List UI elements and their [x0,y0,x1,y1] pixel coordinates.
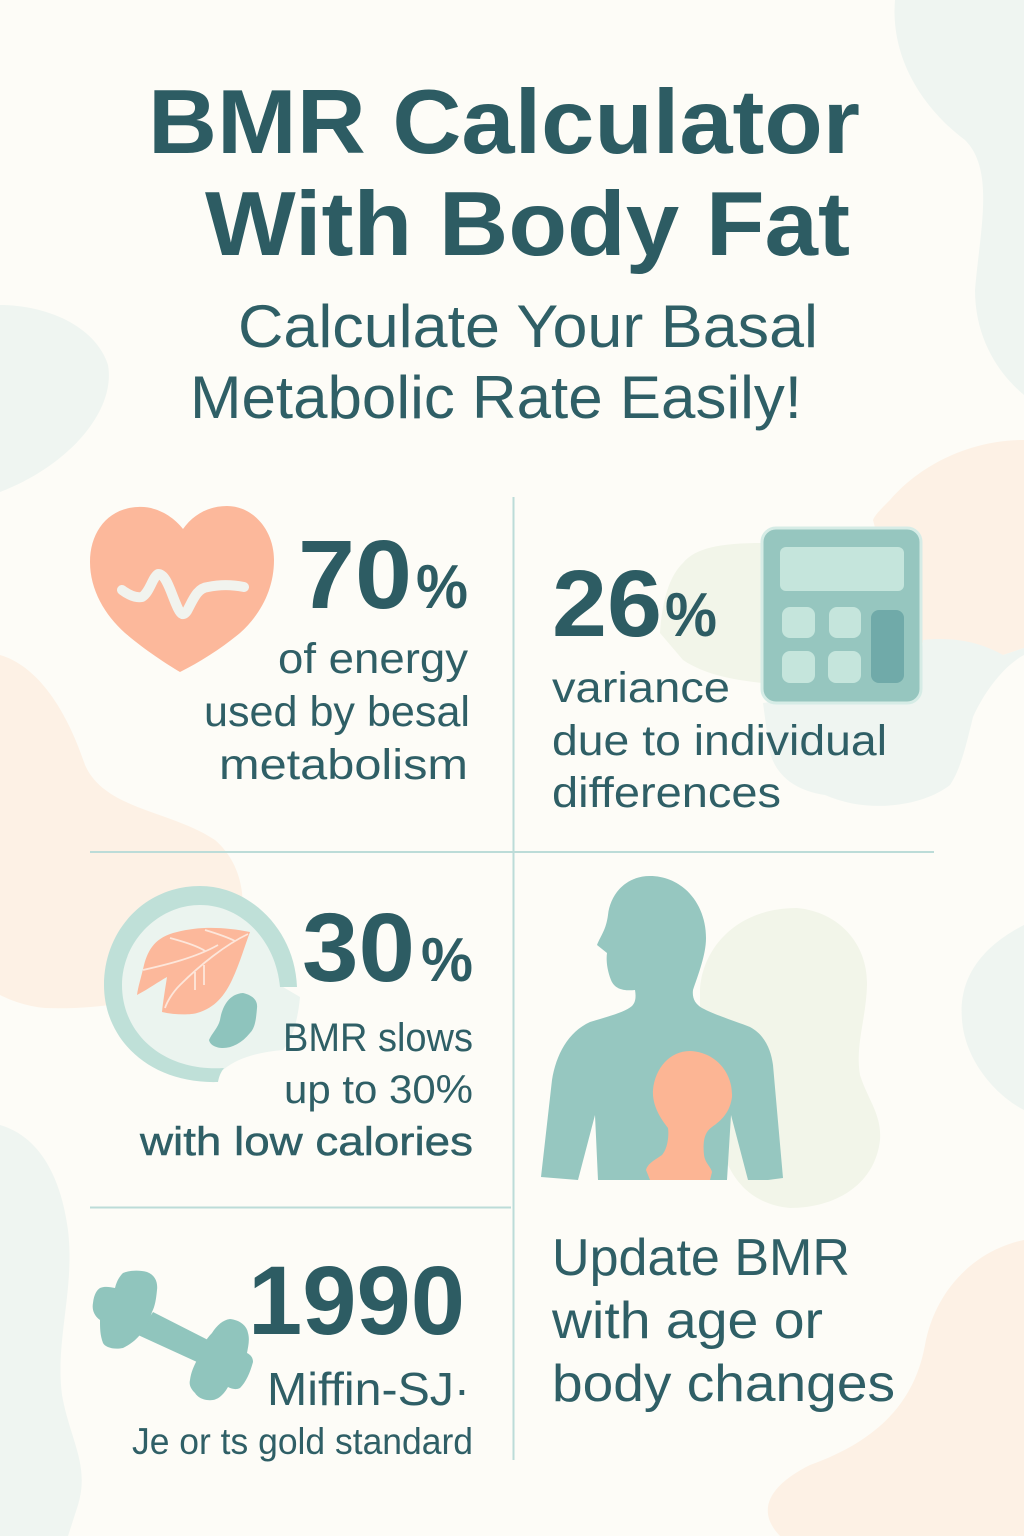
description: 26%: differences [552,769,781,817]
description: 1990: Je or ts gold standard [132,1421,473,1462]
title: With Body Fat [205,174,850,275]
title: BMR Calculator [148,72,860,173]
description: 26%: due to individual [552,717,887,765]
stat: 70%: % [416,553,468,622]
stat: 30%: 30 [302,893,415,1002]
grid divider lines [90,497,934,1460]
icon: plate with leaf [104,886,300,1082]
description: 30%: up to 30% [284,1068,473,1112]
description: 30%: BMR slows [283,1016,473,1060]
stat: 30% [302,893,473,1002]
reminder text [551,1229,895,1413]
description: 70% [204,635,470,789]
icon: body silhouette [541,876,880,1208]
title [148,72,860,275]
stat: 1990: 1990 [248,1246,465,1355]
reminder text: body changes [552,1355,895,1413]
panel: 70% energy [90,506,470,789]
reminder text: Update BMR [552,1229,850,1287]
stat: 30%: % [421,926,473,995]
panel: 30% slowdown [104,886,473,1164]
description: 70%: of energy [278,635,469,683]
panel: 26% variance [552,528,921,817]
stat: 26%: % [665,581,717,650]
description: 70%: metabolism [219,741,468,789]
subtitle: Calculate Your Basal [238,293,818,360]
subtitle: Metabolic Rate Easily! [190,364,802,431]
description: 30%: with low calories [139,1120,473,1164]
panel: 1990 formula [93,1246,473,1462]
subtitle [190,293,818,431]
description: 1990 [132,1363,473,1462]
panel: update reminder [541,876,895,1413]
reminder text: with age or [551,1292,823,1350]
description: 26% [552,664,887,817]
description: 30% [139,1016,473,1164]
stat: 26%: 26 [552,551,662,657]
stat: 70%: 70 [298,520,412,629]
icon: heart with pulse [90,506,274,672]
description: 26%: variance [552,664,730,712]
icon: dumbbell [93,1271,253,1400]
description: 1990: Miffin-SJ· [267,1363,470,1415]
icon: calculator [762,528,921,703]
stat: 26% [552,551,717,657]
description: 70%: used by besal [204,688,470,736]
stat: 70% [298,520,468,629]
